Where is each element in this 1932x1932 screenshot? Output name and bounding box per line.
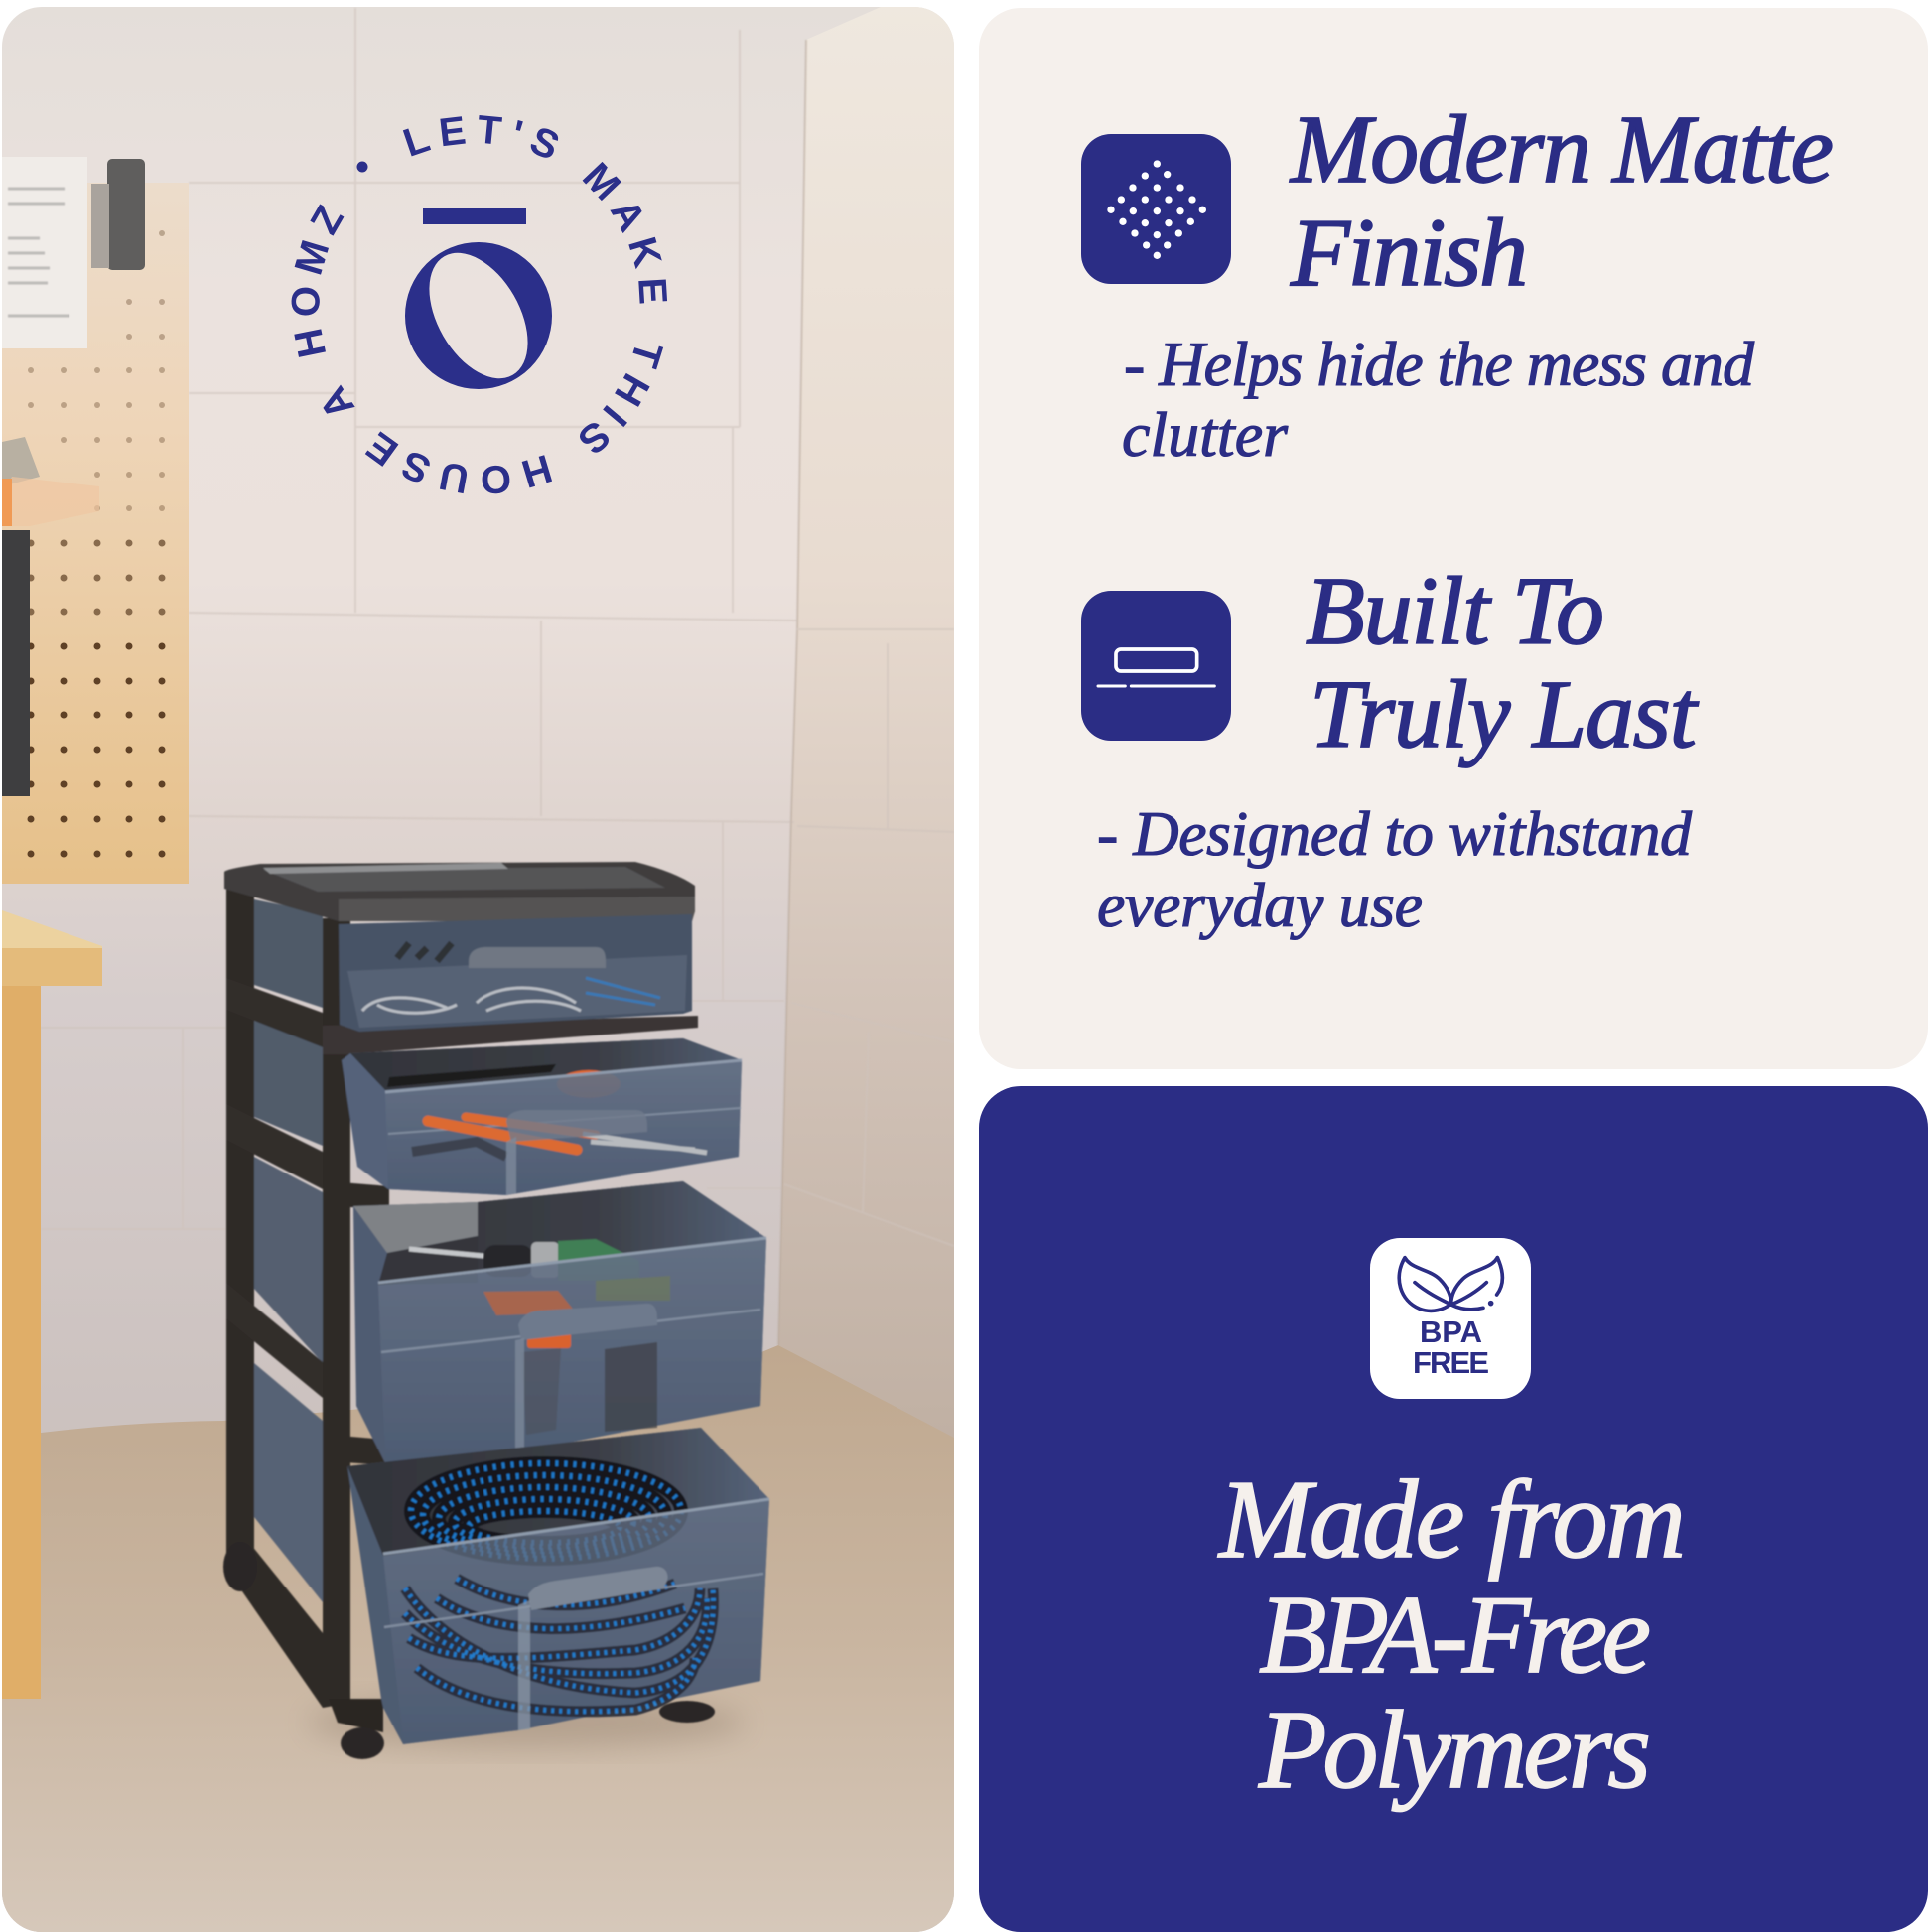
cart: drawer one [339,914,692,1032]
heading: built to truly last: Built To [1306,558,1604,665]
text: finish description: clutter [1122,399,1289,470]
panel: features [979,8,1928,1069]
cart: frame [226,879,698,1732]
heading: made from BPA-free polymers: Polymers [1258,1689,1651,1812]
panel: product photo [2,7,954,1932]
heading: modern matte finish: Finish [1290,200,1528,307]
logo: circular slogan: LET'S MAKE THIS HOUSE A HOMZ [292,115,667,494]
text: finish description [1122,329,1755,470]
heading: made from BPA-free polymers: BPA-Free [1259,1574,1651,1697]
heading: built to truly last: Truly Last [1310,661,1700,768]
cart: drawer three [353,1181,766,1463]
heading: made from BPA-free polymers [1217,1458,1686,1812]
logo badge [292,115,667,494]
logo: ring mark [405,242,552,389]
drawer four: coiled cord [411,1463,681,1559]
cart: wheels [223,1542,715,1759]
icon: BPA free badge: FREE [1413,1345,1489,1380]
cart: drawer two [342,1038,742,1195]
heading: modern matte finish [1289,96,1834,307]
icon: BPA free badge [1370,1238,1531,1399]
text: durability description: everyday use [1097,870,1423,940]
photo: right wall [778,7,954,1440]
photo: floor [2,1345,954,1932]
drawer three: drill [407,1238,623,1277]
panel: BPA free [979,1086,1928,1932]
heading: made from BPA-free polymers: Made from [1217,1458,1686,1582]
icon: durable drawer [1081,591,1231,741]
photo: desk [2,910,102,1699]
text: durability description [1097,798,1693,940]
heading: built to truly last [1306,558,1700,768]
cart: top lid [224,862,695,921]
text: durability description: - Designed to withstand [1097,798,1693,869]
cart: drawer four [347,1428,769,1744]
photo: storage cart [223,862,769,1759]
heading: modern matte finish: Modern Matte [1289,96,1834,204]
photo: back wall [2,7,954,1932]
photo: floor shadow [308,1697,745,1748]
photo: pegboard [2,157,189,884]
icon: matte dots [1081,134,1231,284]
text: finish description: - Helps hide the mess and [1124,329,1755,399]
logo: overbar [423,208,526,224]
icon: BPA free badge: BPA [1420,1314,1482,1349]
